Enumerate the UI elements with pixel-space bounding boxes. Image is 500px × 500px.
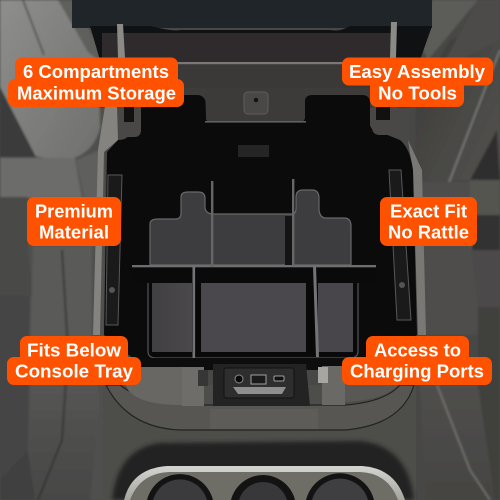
callout: premium material — [27, 197, 121, 246]
right seat — [410, 0, 500, 500]
charging ports — [213, 364, 310, 406]
center shadow upper — [285, 216, 293, 266]
rear slot — [238, 145, 269, 157]
storage bin interior — [104, 95, 417, 360]
callout: exact fit: Exact Fit — [390, 202, 467, 222]
callout: exact fit — [380, 197, 477, 246]
callout: premium material: Premium — [35, 202, 113, 222]
right side slot — [389, 170, 411, 320]
callout: exact fit: No Rattle — [388, 222, 469, 242]
console upper trim — [72, 0, 432, 108]
console side rails — [93, 106, 426, 335]
lower outer wall — [148, 267, 358, 358]
lower compartments — [152, 283, 192, 352]
left seat — [0, 0, 105, 500]
hinge arms — [117, 24, 125, 58]
callout: easy assembly: No Tools — [378, 84, 457, 104]
callout: access to charging ports: Access to — [374, 340, 461, 360]
cup center — [231, 475, 295, 500]
left side slot — [106, 175, 122, 325]
back panel and latch — [205, 88, 306, 123]
callout: premium material: Material — [39, 222, 109, 242]
callout: easy assembly: Easy Assembly — [349, 62, 485, 82]
lower console — [103, 385, 416, 500]
horizontal divider — [132, 265, 376, 267]
cup holders — [124, 466, 405, 500]
front bezel — [100, 358, 416, 430]
callout: access to charging ports — [342, 336, 492, 385]
side mount tabs — [118, 107, 397, 137]
callout: fits below console tray: Console Tray — [15, 362, 133, 382]
callout: 6 compartments — [8, 58, 184, 107]
cup right — [306, 473, 374, 500]
callout: 6 compartments: Maximum Storage — [17, 84, 176, 104]
organizer tray — [132, 179, 376, 358]
callout: fits below console tray: Fits Below — [27, 340, 122, 360]
callout: fits below console tray — [7, 336, 141, 385]
callout: access to charging ports: Charging Ports — [350, 362, 484, 382]
cup left — [147, 474, 213, 500]
vertical dividers — [211, 181, 213, 267]
callout: easy assembly — [342, 58, 493, 107]
callout: 6 compartments: 6 Compartments — [23, 62, 169, 82]
